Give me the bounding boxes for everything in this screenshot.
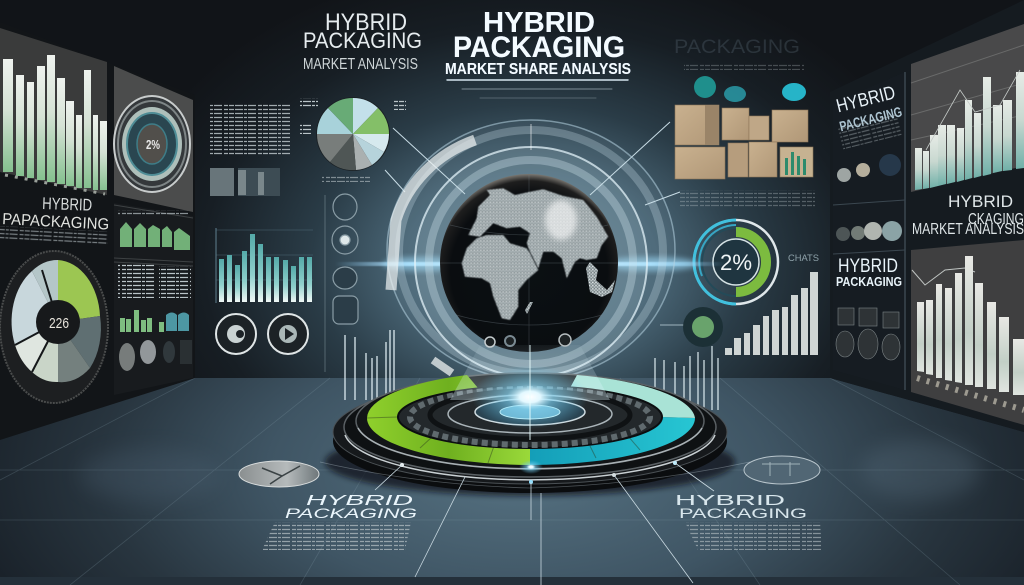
icon: floor emblem left [239, 461, 319, 487]
panel: left bar chart [0, 28, 107, 195]
heading: secondary hybrid packaging market analysis: MARKET ANALYSIS [303, 56, 418, 73]
panel: right upper bar chart [911, 24, 1024, 192]
icons: teal badges [684, 64, 806, 102]
heading: main title: HYBRID [483, 7, 595, 39]
ghost heading: PACKAGING [674, 37, 800, 58]
pie chart: left 226 [0, 251, 108, 403]
heading: right hybrid packaging 1 [832, 82, 904, 134]
hologram beam [450, 345, 610, 400]
label: floor hybrid packaging right [675, 493, 807, 521]
panel: right column packaging [832, 72, 905, 390]
pie annotations [300, 98, 406, 182]
cardboard boxes [675, 105, 813, 179]
icon: green globe badge [683, 307, 723, 347]
label: charts: CHATS [788, 253, 819, 263]
icon: round badge right [268, 314, 308, 354]
pie chart: top centre [316, 97, 390, 171]
centre light flare [472, 345, 588, 474]
donut value: 2% [720, 250, 752, 275]
heading: right hybrid packaging 2 [836, 256, 902, 289]
heading: right hybrid packaging 1: HYBRID [834, 82, 898, 117]
panel: left ring gauge [114, 66, 193, 212]
label: floor hybrid packaging left [285, 493, 417, 521]
label: floor hybrid packaging right: HYBRID [675, 493, 785, 509]
heading: secondary hybrid packaging market analysis: HYBRID [325, 9, 407, 36]
heading: right wall hybrid market analysis [912, 192, 1024, 238]
dais inner dial [398, 386, 662, 448]
label: floor hybrid packaging left: HYBRID [306, 493, 413, 509]
icons: small centre-left column [325, 194, 358, 372]
floor [0, 378, 1024, 585]
floor connector lines [320, 462, 750, 585]
ring segment: green [367, 375, 530, 465]
right wall backing [830, 0, 1024, 432]
heading: main title: PACKAGING [453, 31, 625, 64]
heading: main title: MARKET SHARE ANALYSIS [445, 61, 631, 78]
heading: right hybrid packaging 2: PACKAGING [836, 274, 902, 289]
icon: round badge left [216, 314, 256, 354]
gauge value: 2% [146, 137, 160, 152]
map: madagascar and southeast asia [525, 262, 615, 314]
horizontal lens flare [335, 257, 725, 271]
map: eurasia [468, 188, 608, 278]
icon: floor emblem right [744, 456, 820, 484]
pie centre value: 226 [49, 315, 69, 332]
text block: below boxes [680, 190, 815, 208]
heading: secondary hybrid packaging market analysis: PACKAGING [303, 28, 422, 53]
connector lines [385, 122, 695, 325]
heading: left wall hybrid packaging [0, 194, 110, 245]
heading: left wall hybrid packaging: PAPACKAGING [2, 211, 110, 234]
glass ring assembly [387, 120, 675, 380]
panel: right lower bar chart [911, 240, 1024, 425]
heading: right wall hybrid market analysis: HYBRID [948, 192, 1013, 211]
dais platform [325, 373, 735, 496]
heading: right hybrid packaging 2: HYBRID [838, 256, 898, 277]
label: floor hybrid packaging left: PACKAGING [285, 506, 417, 521]
heading: right hybrid packaging 1: PACKAGING [838, 103, 904, 134]
map: africa [462, 235, 538, 320]
text block: floor left [262, 522, 411, 550]
heading: left wall hybrid packaging: HYBRID [42, 194, 92, 215]
bar chart: rising bars [725, 272, 818, 355]
ring segment: cyan [530, 417, 695, 465]
heading: secondary hybrid packaging market analysis [303, 9, 422, 73]
bar chart: centre-left teal [216, 228, 313, 303]
panel: left column mini charts and icons [114, 203, 193, 395]
left wall backing [0, 22, 195, 440]
title underlines [447, 80, 628, 98]
image strip [210, 168, 280, 196]
hologram bars: right [655, 346, 718, 410]
globe [440, 174, 618, 352]
donut chart: 2% [694, 220, 778, 304]
heading: main title [445, 7, 631, 78]
label: floor hybrid packaging right: PACKAGING [679, 506, 807, 521]
ring segment: pale cyan [570, 375, 695, 418]
text block: floor right [685, 522, 822, 550]
text block: wall paragraph [210, 104, 292, 155]
hologram bars: left [345, 330, 394, 400]
